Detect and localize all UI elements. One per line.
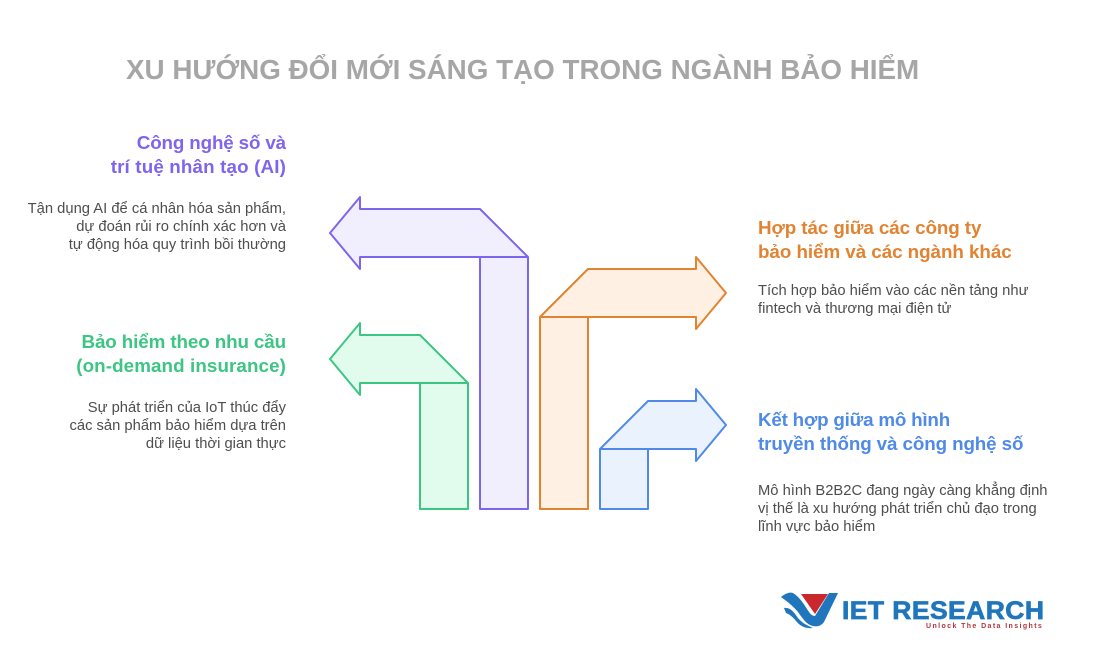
text: hybrid: vị thế là xu hướng phát triển chủ đạo trong (758, 501, 1037, 517)
text: on-demand: dữ liệu thời gian thực (146, 436, 286, 452)
text: hybrid: Mô hình B2B2C đang ngày càng khẳng định (758, 483, 1047, 499)
text: hybrid (758, 482, 1047, 535)
panel: on-demand (70, 331, 286, 452)
heading: on-demand: Bảo hiểm theo nhu cầu (81, 331, 286, 352)
text: AI: Tận dụng AI để cá nhân hóa sản phẩm, (28, 201, 286, 217)
heading: hybrid: truyền thống và công nghệ số (758, 433, 1023, 454)
heading: partnership: bảo hiểm và các ngành khác (758, 241, 1012, 262)
text: on-demand: các sản phẩm bảo hiểm dựa trên (70, 418, 286, 434)
heading: AI (111, 132, 286, 177)
heading: AI: Công nghệ số và (137, 132, 286, 153)
arrow: blue (600, 389, 726, 509)
text: on-demand: Sự phát triển của IoT thúc đẩy (88, 400, 286, 416)
logo wordmark: IET RESEARCH (842, 597, 1044, 625)
arrow: purple (330, 197, 528, 509)
logo mark (781, 592, 838, 628)
text: on-demand (70, 400, 286, 452)
text: partnership: Tích hợp bảo hiểm vào các nền tảng như (758, 283, 1028, 299)
heading: hybrid: Kết hợp giữa mô hình (758, 409, 950, 430)
text: AI: tự động hóa quy trình bồi thường (69, 237, 286, 253)
heading: on-demand: (on-demand insurance) (76, 355, 286, 376)
panel: hybrid (758, 409, 1047, 535)
text: hybrid: lĩnh vực bảo hiểm (758, 519, 875, 535)
panel: partnership (758, 217, 1028, 317)
heading: partnership (758, 217, 1012, 262)
panel: AI (28, 132, 286, 253)
text: AI: dự đoán rủi ro chính xác hơn và (76, 219, 286, 235)
heading: AI: trí tuệ nhân tạo (AI) (111, 156, 286, 177)
arrow: orange (540, 257, 726, 509)
arrow: green (330, 323, 468, 509)
heading: hybrid (758, 409, 1023, 454)
text: partnership: fintech và thương mại điện tử (758, 301, 951, 317)
logo (781, 592, 1044, 630)
logo tagline: Unlock The Data Insights (926, 623, 1043, 630)
text: AI (28, 201, 286, 253)
text: partnership (758, 283, 1028, 317)
title: XU HƯỚNG ĐỔI MỚI SÁNG TẠO TRONG NGÀNH BẢO HIỂM (126, 54, 919, 85)
heading: partnership: Hợp tác giữa các công ty (758, 217, 981, 238)
heading: on-demand (76, 331, 286, 376)
